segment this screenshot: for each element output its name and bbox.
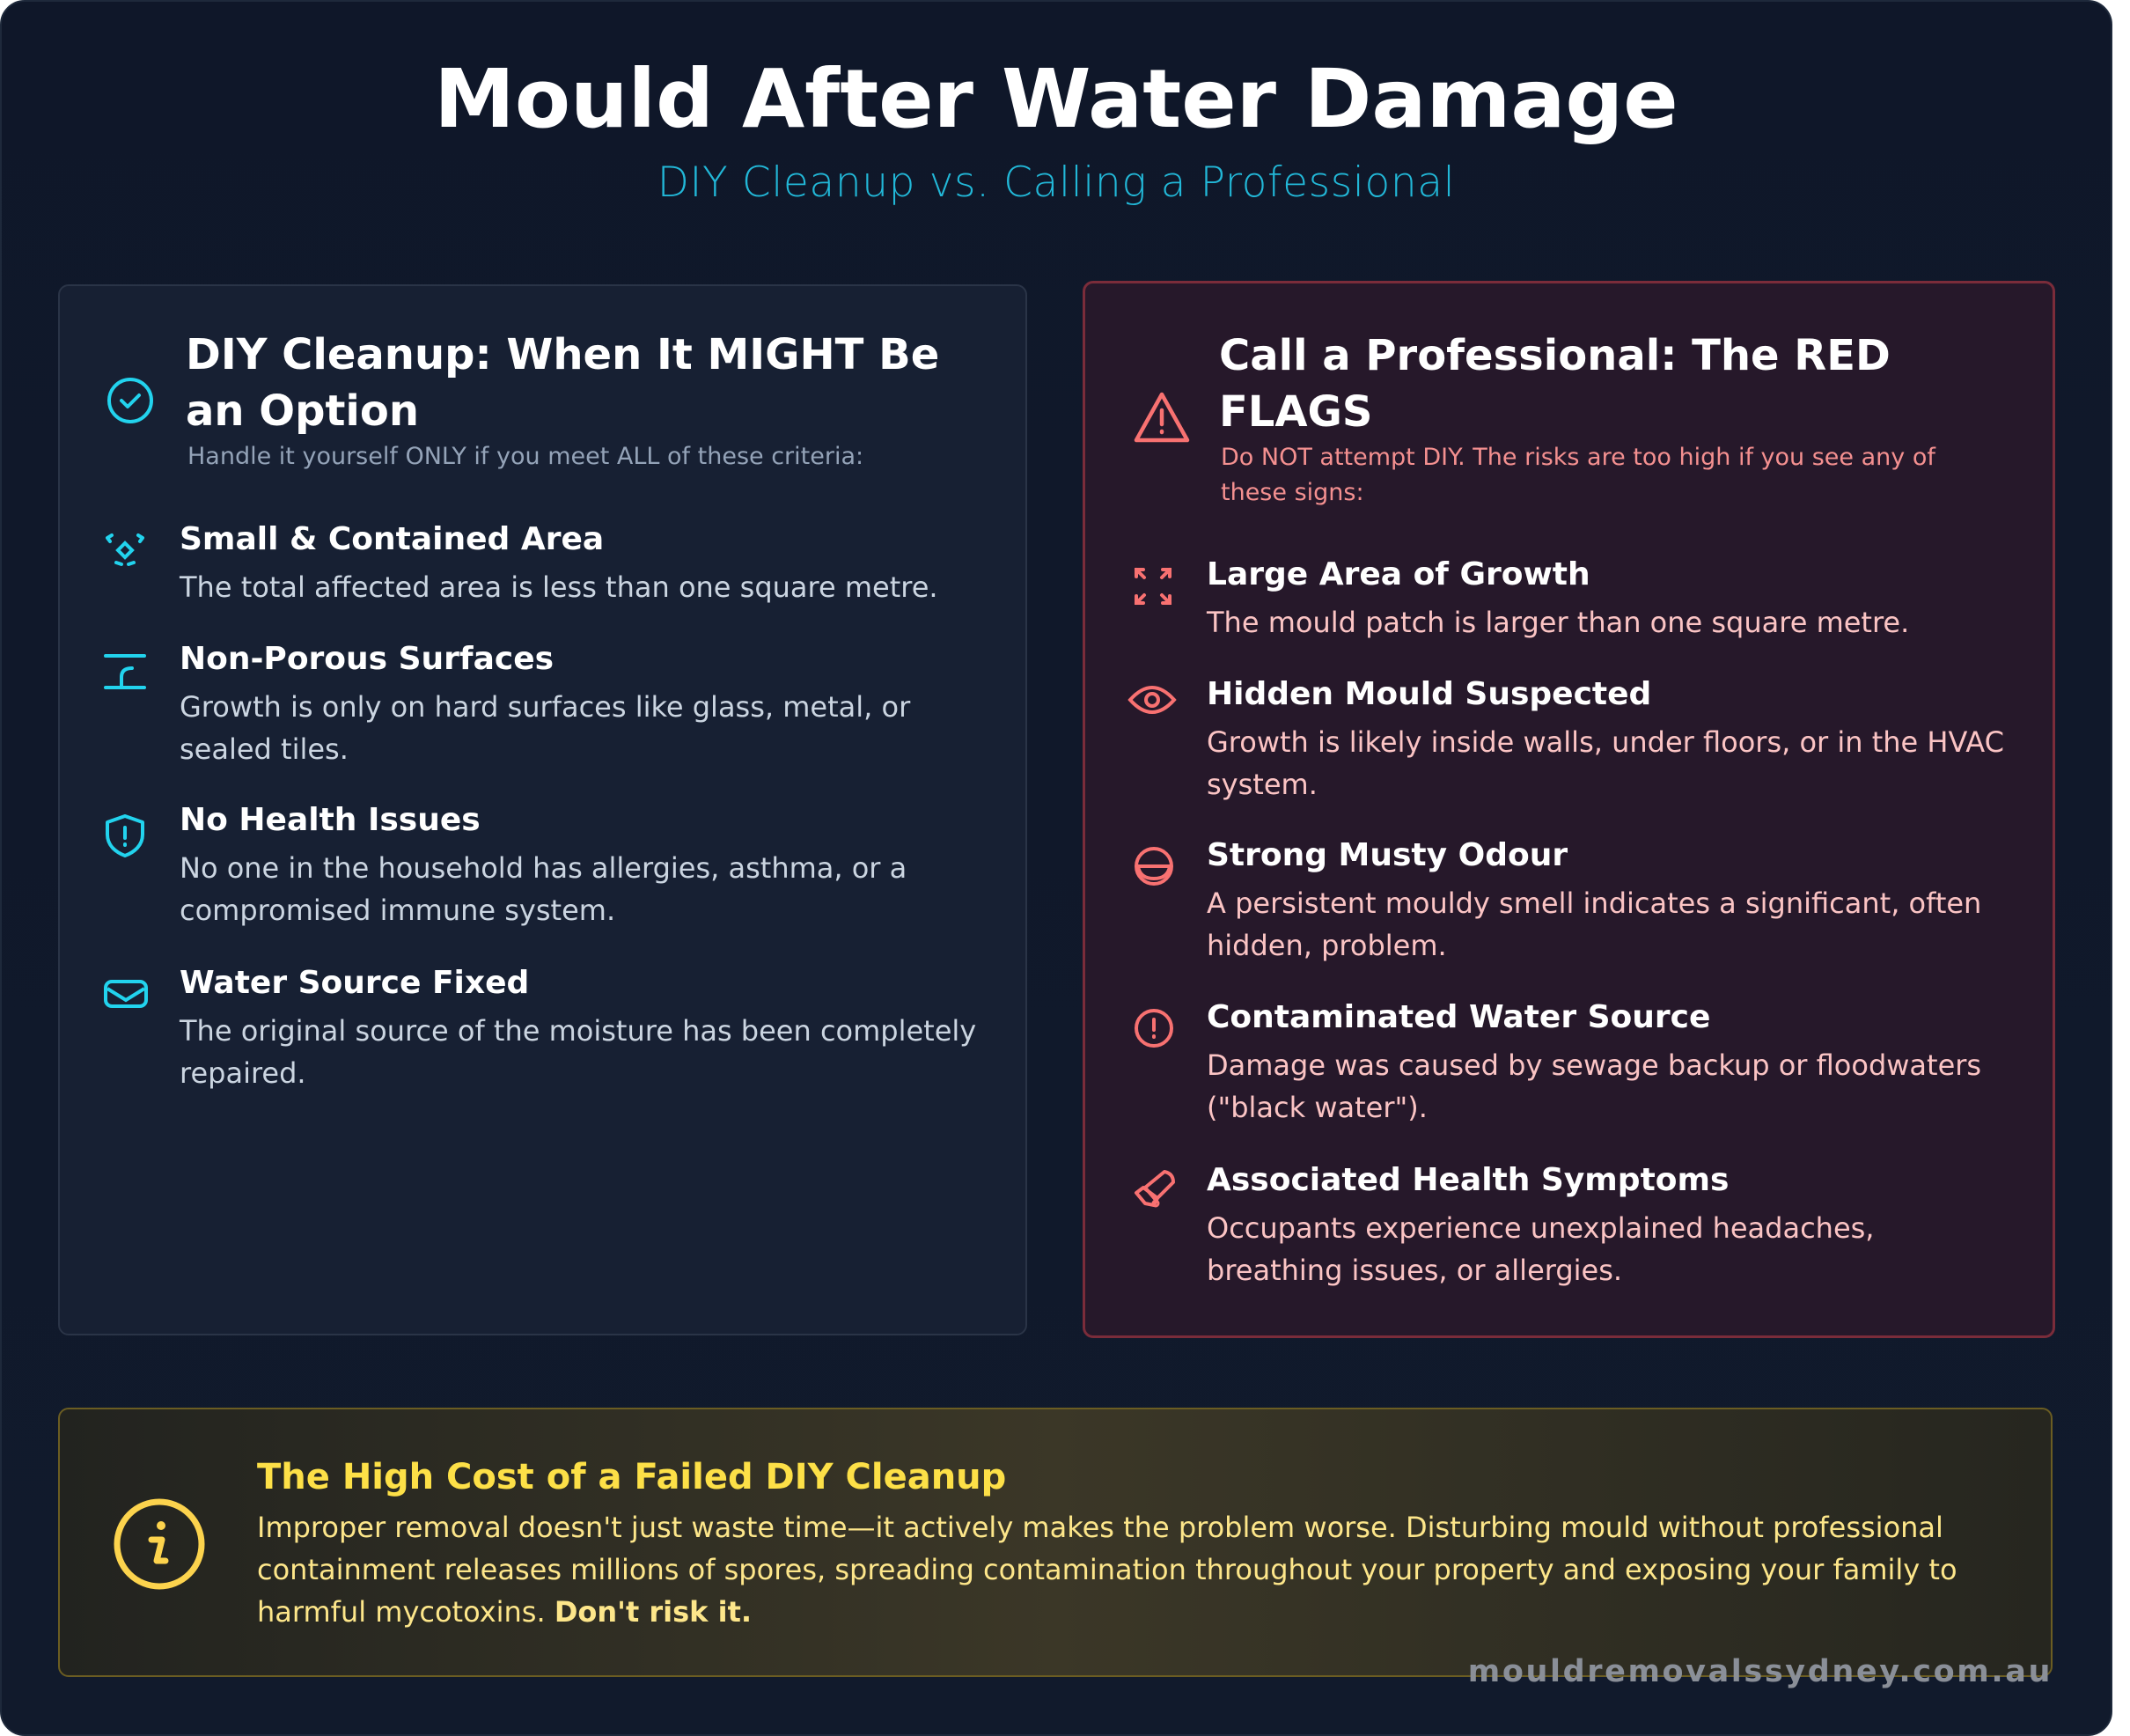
icon: warning triangle <box>1134 393 1190 442</box>
item: health symptoms: Occupants experience unexplained headaches, <box>1207 1211 1874 1245</box>
item: non-porous: Growth is only on hard surfaces like glass, metal, or <box>180 690 910 724</box>
item: health symptoms: breathing issues, or allergies. <box>1207 1254 1622 1287</box>
item: water source fixed: repaired. <box>180 1056 306 1090</box>
item: no health issues: compromised immune system. <box>180 894 615 927</box>
subheading <box>1221 444 1936 506</box>
subtitle: DIY Cleanup vs. Calling a Professional <box>657 158 1455 207</box>
item: water source fixed: The original source of the moisture has been completely <box>180 1014 976 1048</box>
item: health symptoms <box>1134 1162 1874 1287</box>
item: water source fixed <box>104 965 976 1090</box>
heading: an Option <box>186 386 419 436</box>
item: health symptoms: Associated Health Symptoms <box>1207 1162 1729 1198</box>
callout text: Improper removal doesn't just waste time—it actively makes the problem worse. Disturbing mould without professional <box>257 1511 1943 1544</box>
watermark: mouldremovalssydney.com.au <box>1468 1654 2053 1689</box>
item: large area: Large Area of Growth <box>1207 556 1590 592</box>
item: musty odour: Strong Musty Odour <box>1207 837 1568 873</box>
heading: FLAGS <box>1219 387 1373 437</box>
item: small area: The total affected area is less than one square metre. <box>180 570 938 604</box>
item: large area: The mould patch is larger than one square metre. <box>1207 606 1909 639</box>
item: hidden mould: system. <box>1207 768 1318 801</box>
callout text <box>257 1511 1957 1629</box>
panel: DIY <box>58 284 1027 1335</box>
item: contaminated water: Contaminated Water Source <box>1207 999 1710 1035</box>
title: Mould After Water Damage <box>434 52 1678 146</box>
subheading: Do NOT attempt DIY. The risks are too high if you see any of <box>1221 444 1935 471</box>
item: non-porous: sealed tiles. <box>180 732 349 766</box>
item: contaminated water: ("black water"). <box>1207 1091 1428 1124</box>
item: musty odour <box>1135 837 1981 962</box>
item: no health issues <box>106 802 907 927</box>
item: hidden mould: Growth is likely inside walls, under floors, or in the HVAC <box>1207 725 2004 759</box>
item: small area <box>106 521 938 604</box>
item: non-porous: Non-Porous Surfaces <box>180 641 554 677</box>
item: contaminated water: Damage was caused by sewage backup or floodwaters <box>1207 1048 1981 1082</box>
item: no health issues: No Health Issues <box>180 802 481 838</box>
item: no health issues: No one in the household has allergies, asthma, or a <box>180 851 907 885</box>
panel: red flags <box>1083 281 2055 1338</box>
callout title: The High Cost of a Failed DIY Cleanup <box>257 1457 1006 1497</box>
icon: check circle <box>107 378 153 423</box>
item: musty odour: hidden, problem. <box>1207 929 1447 962</box>
callout text: harmful mycotoxins. Don't risk it. <box>257 1595 752 1629</box>
heading: DIY Cleanup: When It MIGHT Be <box>186 330 939 379</box>
item: hidden mould <box>1127 676 2004 801</box>
item: small area: Small & Contained Area <box>180 521 604 557</box>
item: water source fixed: Water Source Fixed <box>180 965 529 1001</box>
callout text: containment releases millions of spores, spreading contamination throughout your property and exposing your family to <box>257 1553 1957 1586</box>
item: contaminated water <box>1135 999 1981 1124</box>
subheading: Handle it yourself ONLY if you meet ALL of these criteria: <box>187 443 863 470</box>
item: non-porous <box>104 641 910 766</box>
icon: info <box>114 1498 204 1590</box>
subheading: these signs: <box>1221 479 1364 506</box>
heading: Call a Professional: The RED <box>1219 331 1891 380</box>
heading <box>1219 331 1891 437</box>
item: large area <box>1134 556 1909 639</box>
item: musty odour: A persistent mouldy smell indicates a significant, often <box>1207 886 1981 920</box>
callout: high cost <box>58 1408 2053 1677</box>
heading <box>186 330 939 436</box>
item: hidden mould: Hidden Mould Suspected <box>1207 676 1651 712</box>
